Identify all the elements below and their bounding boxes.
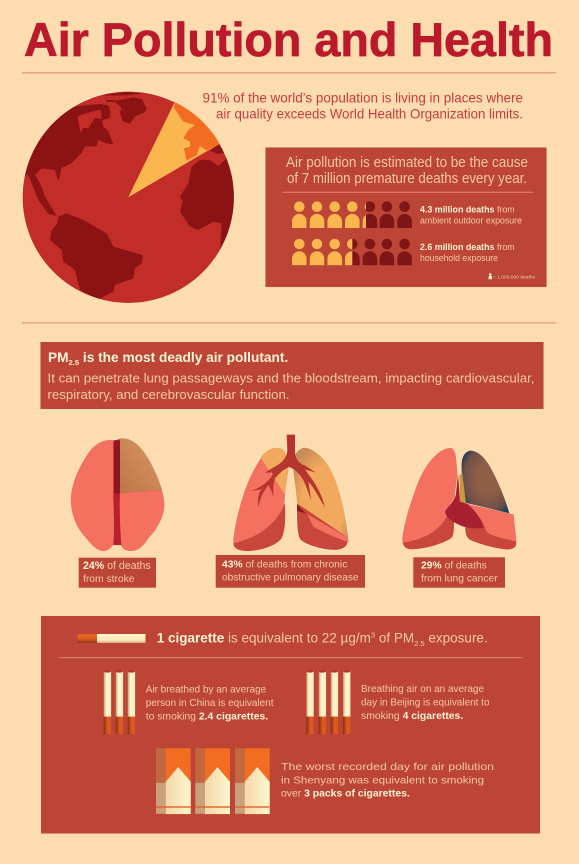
label: stroke: from stroke (83, 574, 135, 585)
intro text: 91% statistic: air quality exceeds World Health Organization limits. (216, 106, 523, 121)
text: China: Air breathed by an average (146, 685, 266, 696)
stat: household (420, 242, 515, 263)
panel heading (286, 155, 528, 187)
land: Greenland (106, 97, 147, 124)
panel heading: PM (48, 350, 69, 365)
label: stroke (79, 558, 156, 588)
icon: horizontal cigarette (78, 634, 148, 643)
intro text: 91% statistic (202, 91, 523, 121)
yellow vessel (459, 473, 466, 503)
cigarette heading: 3 (371, 630, 375, 639)
panel body: respiratory, and cerebrovascular function. (48, 387, 290, 402)
heart (445, 473, 484, 528)
icon: lungs with COPD (233, 435, 349, 551)
right lung lower (465, 505, 517, 550)
stat: outdoor: ambient outdoor exposure (420, 216, 522, 226)
tumour lobe (462, 451, 509, 513)
left lung (233, 448, 289, 551)
label: lung cancer: from lung cancer (421, 574, 498, 585)
panel heading: Air pollution is estimated to be the cause (286, 155, 528, 171)
icon: lungs with cancer (402, 447, 517, 550)
wedge land (174, 102, 220, 160)
panel body: It can penetrate lung passageways and the bloodstream, impacting cardiovascular, (48, 370, 534, 386)
panel heading: of 7 million premature deaths every year. (287, 171, 527, 187)
cigarette heading: of PM (375, 630, 414, 645)
pictogram: household exposure (292, 239, 412, 265)
panel: PM2.5 (40, 342, 544, 409)
pie wedge (128, 102, 220, 197)
text: China: person in China is equivalent (146, 698, 274, 709)
panel: cigarette equivalents (41, 616, 540, 834)
left lung (402, 447, 458, 549)
text: Beijing: smoking 4 cigarettes. (361, 711, 463, 722)
land: Europe (210, 144, 225, 154)
label: COPD (216, 555, 365, 588)
text: Beijing: day in Beijing is equivalent to (361, 698, 490, 708)
text: Beijing: Breathing air on an average (361, 684, 484, 695)
icon: 4 cigarettes (306, 670, 350, 734)
text: Beijing (361, 684, 490, 722)
label: lung cancer (413, 557, 505, 588)
legend (489, 273, 536, 279)
label: stroke: 24% of deaths (83, 560, 151, 572)
intro text: 91% statistic: 91% of the world’s population is living in places where (202, 91, 523, 106)
text: China (146, 685, 274, 722)
pictogram: outdoor exposure (292, 201, 412, 228)
right lung (293, 448, 348, 550)
label: COPD: 43% of deaths from chronic (222, 560, 347, 570)
label: lung cancer: 29% of deaths (421, 560, 487, 572)
title: Air Pollution and Health (24, 13, 553, 66)
bronchi (251, 435, 325, 507)
text: Shenyang: over 3 packs of cigarettes. (281, 789, 410, 800)
stat: household: 2.6 million deaths from (420, 242, 515, 252)
panel: 7 million deaths (265, 147, 547, 288)
land: South America (50, 213, 143, 299)
label: COPD: obstructive pulmonary disease (222, 573, 359, 584)
text: China: to smoking 2.4 cigarettes. (146, 712, 268, 722)
panel heading: 2.5 (69, 358, 80, 367)
panel heading: is the most deadly air pollutant. (79, 350, 288, 365)
panel body (48, 370, 534, 402)
stat: outdoor (420, 205, 522, 226)
stat: household: household exposure (420, 253, 498, 263)
text: Shenyang (281, 762, 494, 800)
cigarette heading: 1 cigarette is equivalent to 22 µg/m (157, 630, 371, 645)
cigarette heading: 2.5 (414, 639, 425, 648)
cigarette heading: exposure. (425, 630, 488, 645)
text: Shenyang: The worst recorded day for air pollution (281, 762, 494, 773)
land: Africa (180, 158, 234, 250)
land: North America (17, 104, 113, 216)
stat: outdoor: 4.3 million deaths from (420, 205, 515, 215)
icon: 3 cigarettes (104, 670, 135, 734)
legend: = 1,000,000 deaths (493, 274, 536, 279)
text: Shenyang: in Shenyang was equivalent to smoking (281, 775, 484, 786)
icon: brain (71, 438, 164, 551)
land: Arctic strip (100, 92, 143, 96)
icon: 3 packs (156, 748, 270, 814)
Hudson Bay (77, 110, 102, 133)
globe with 9% wedge (17, 91, 240, 303)
